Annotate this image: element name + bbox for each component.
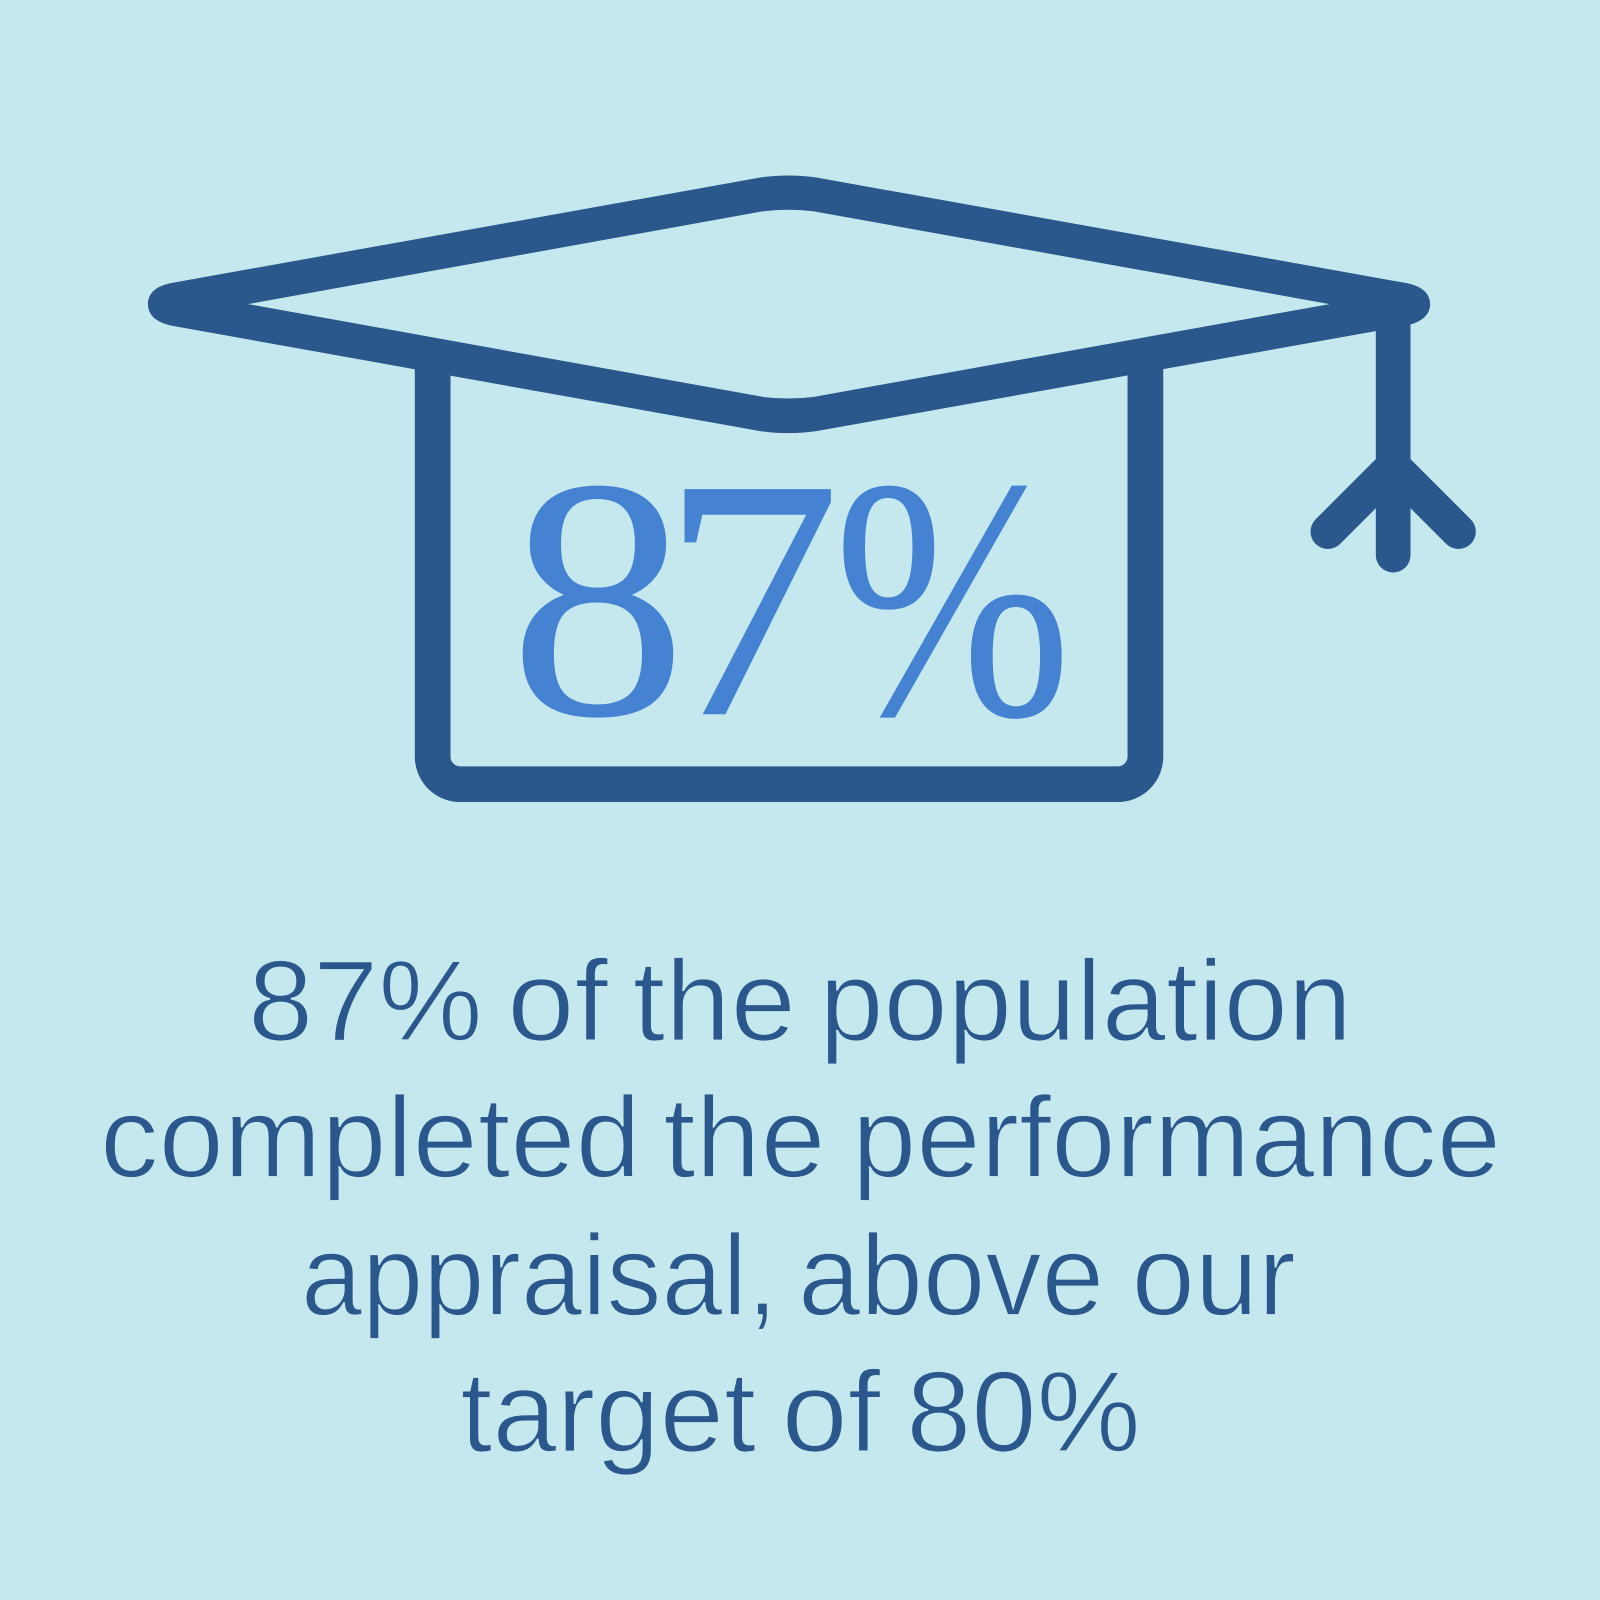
big statistic: 87% [509,409,1071,789]
big statistic: 87%: % [834,409,1071,789]
description text [100,937,1501,1477]
description text: of [507,937,609,1065]
description text: above [798,1212,1104,1340]
description text: target [460,1349,756,1477]
description text: our [1132,1212,1296,1340]
description text: population [819,937,1352,1065]
tassel [1328,316,1458,555]
description text: 80% [906,1349,1141,1477]
big statistic: 87%: 7 [661,409,841,789]
description text: of [782,1349,882,1477]
description text: appraisal, [301,1212,778,1340]
description text: performance [852,1074,1501,1202]
icon: graduation cap [148,176,1458,784]
description text: the [633,937,796,1065]
cap base [433,359,1145,784]
description text: completed [100,1074,641,1202]
big statistic: 87%: 8 [509,409,687,789]
mortarboard [148,176,1430,433]
description text: 87% [248,937,483,1065]
description text: the [663,1074,826,1202]
